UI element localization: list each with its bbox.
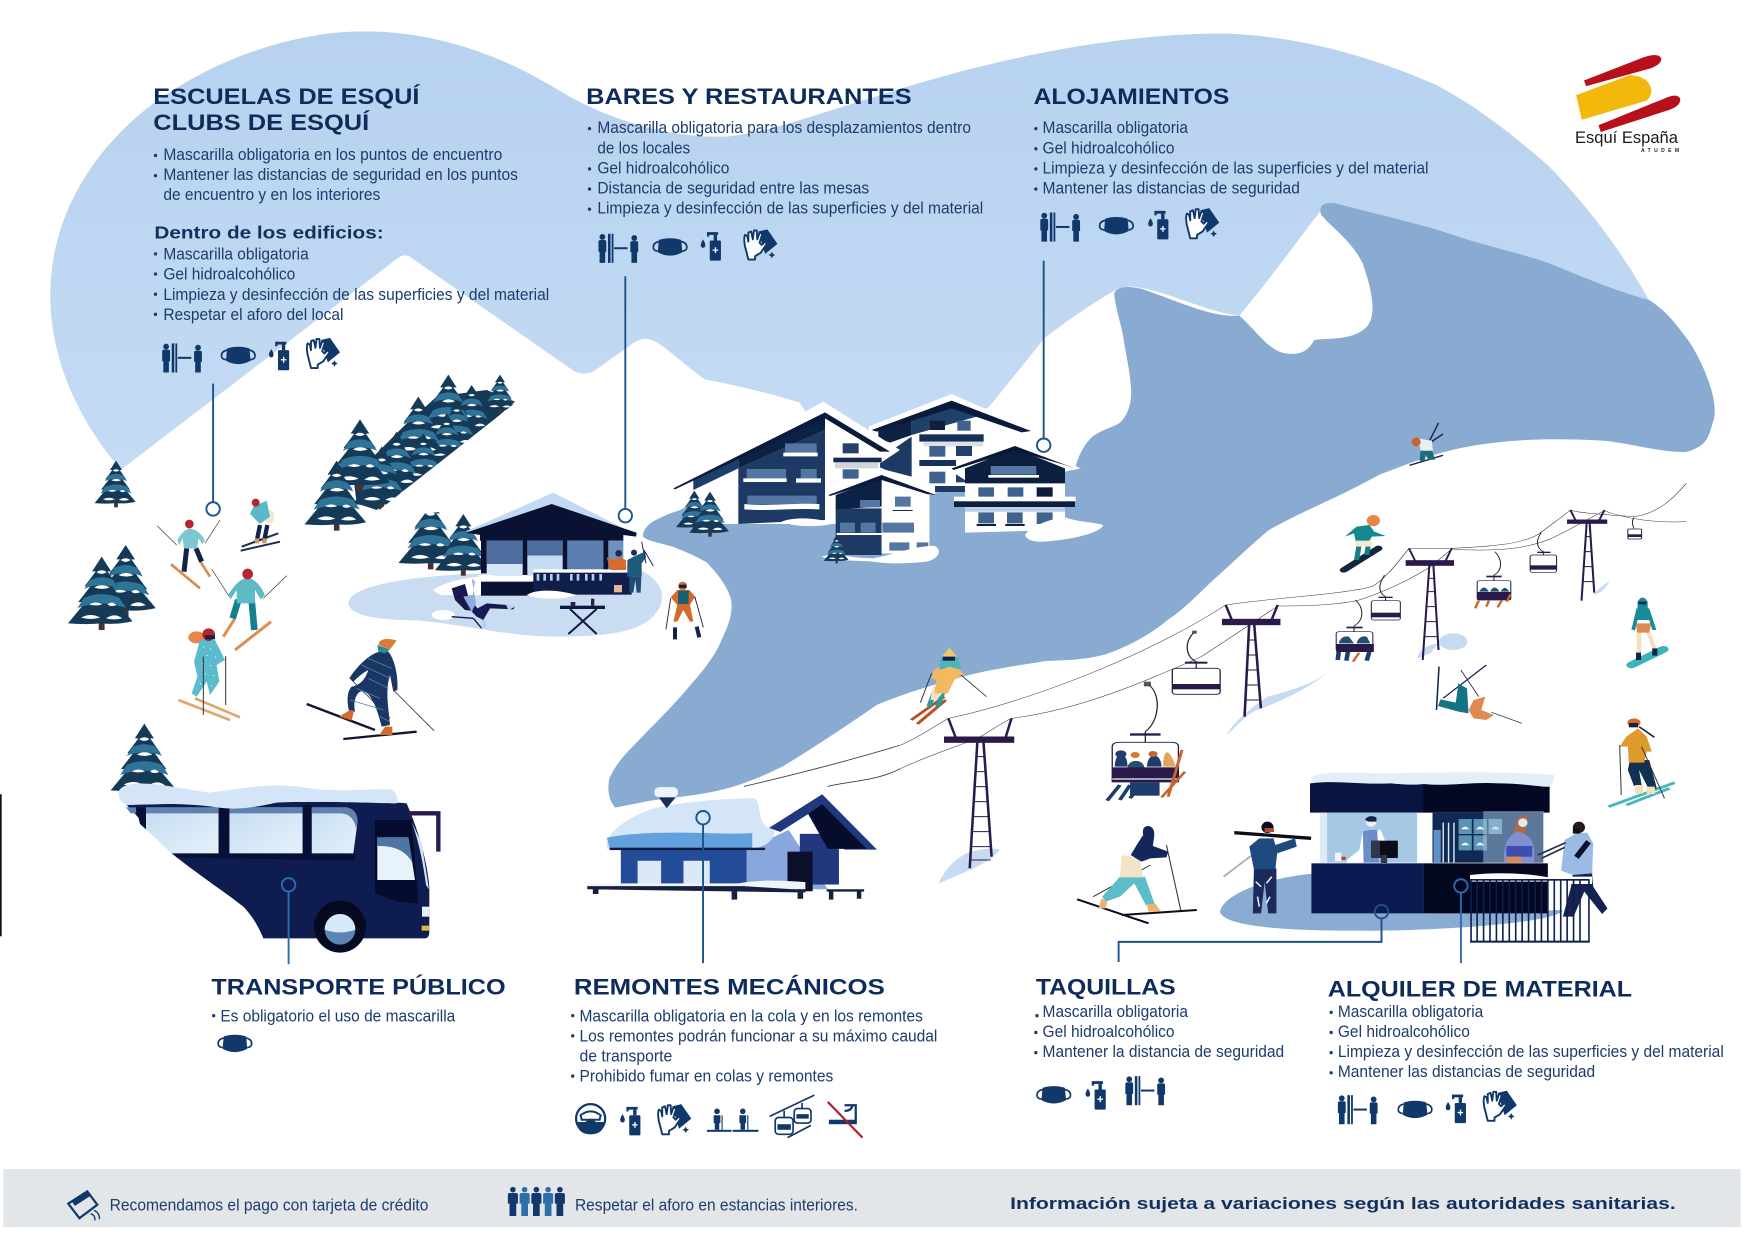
connector: remontes: [696, 811, 710, 963]
tree behind bus: [111, 724, 175, 797]
panel: remontes mecánicos: [571, 974, 937, 1138]
icon: edge mark: [0, 794, 2, 936]
logo: esquí españa: [1575, 55, 1680, 154]
skier teal back view: [157, 520, 220, 588]
chair with riders small 1: [1336, 600, 1374, 662]
text block: alquiler: [1329, 1002, 1724, 1081]
connector: taquillas: [1119, 905, 1388, 962]
text block: remontes: de transporte: [579, 1047, 672, 1066]
skier small with backpack: [241, 499, 280, 551]
station right wing: [747, 794, 877, 891]
cabin: [432, 493, 637, 620]
text block: bares: Gel hidroalcohólico: [597, 158, 729, 177]
fence: [1470, 873, 1590, 943]
terrace table: [560, 599, 605, 634]
skier navy striped: [307, 639, 434, 739]
connector: bares: [619, 276, 632, 522]
snow puddle: [348, 566, 662, 637]
skier orange: [666, 582, 703, 639]
pylon 2: [1223, 605, 1280, 717]
text block: alquiler: Mascarilla obligatoria: [1338, 1002, 1484, 1021]
fallen skier: [1436, 665, 1522, 723]
icon: glove: [658, 1104, 691, 1134]
heading: escuelas: ESCUELAS DE ESQUÍ: [153, 84, 421, 109]
text block: puntos de encuentro: Mascarilla obligatoria en los puntos de encuentro: [163, 145, 502, 164]
logo: esquí españa: Esquí España: [1575, 128, 1679, 147]
station terrace deck: [587, 881, 864, 900]
background: dark blue mountain and slope: [608, 203, 1715, 808]
footer bar: [3, 1169, 1741, 1227]
text block: remontes: Prohibido fumar en colas y remontes: [579, 1067, 833, 1086]
text block: bares: [588, 118, 983, 218]
illustration: lift station building: [587, 787, 877, 900]
text block: bares: Distancia de seguridad entre las mesas: [597, 179, 869, 198]
text block: alojamientos: Mascarilla obligatoria: [1043, 118, 1189, 137]
logo: esquí españa: ATUDEM: [1641, 148, 1679, 154]
small skier on the upper ridge: [1409, 423, 1443, 465]
man carrying skis: [1224, 822, 1311, 913]
icon: helmet mask: [576, 1104, 605, 1134]
cables: [901, 483, 1686, 768]
person on deck chair: [452, 578, 516, 628]
icon: gondolas: [770, 1095, 814, 1138]
pylon 3: [1406, 548, 1453, 660]
panel: taquillas: [1034, 974, 1284, 1110]
icon: queue distance: [707, 1109, 758, 1132]
snowboarder teal hood: [1631, 597, 1663, 665]
text block: puntos de encuentro: [154, 145, 518, 204]
pylon 4: [1568, 510, 1606, 601]
panel: transporte público: [211, 974, 506, 1052]
skier girl with dotted suit: [178, 628, 240, 720]
connector: alojamientos: [1037, 261, 1050, 452]
text block: alquiler: Mantener las distancias de seguridad: [1338, 1062, 1595, 1081]
trees beside cabin: [398, 499, 489, 576]
illustration: cabin restaurant scene: [348, 493, 703, 639]
connector: alquiler: [1454, 879, 1468, 963]
heading: escuelas: [153, 84, 421, 135]
text block: alojamientos: [1034, 118, 1428, 198]
gondola empty 2: [1371, 575, 1400, 620]
text block: alojamientos: Mantener las distancias de seguridad: [1043, 179, 1300, 198]
icons: taquillas: [1037, 1076, 1165, 1110]
heading: taquillas: TAQUILLAS: [1036, 974, 1176, 999]
rental window: [1432, 811, 1544, 863]
walking skier: [1077, 826, 1197, 923]
footer text: aforo: Respetar el aforo en estancias interiores.: [575, 1196, 858, 1214]
customer with jacket: [1538, 822, 1607, 917]
icon: people capacity: [508, 1187, 565, 1216]
illustration: skiers and firs on the left slope: [68, 375, 522, 739]
text block: alojamientos: Gel hidroalcohólico: [1043, 138, 1175, 157]
text block: dentro de los edificios: Gel hidroalcohólico: [163, 265, 295, 284]
icons: escuelas: [162, 338, 340, 373]
footer text: disclaimer: Información sujeta a variaciones según las autoridades sanitarias.: [1010, 1194, 1676, 1213]
chair with riders small 2: [1475, 552, 1511, 608]
text block: alquiler: Limpieza y desinfección de las superficies y del material: [1338, 1042, 1724, 1061]
background: light blue sky mountain: [50, 31, 1649, 470]
illustration: bus with snow: [111, 724, 438, 953]
text block: puntos de encuentro: de encuentro y en los interiores: [163, 185, 380, 204]
skier ochre jacket: [1609, 718, 1675, 807]
building: back right chalet: [868, 394, 1033, 493]
text block: taquillas: Gel hidroalcohólico: [1043, 1022, 1175, 1041]
bus wheel: [314, 901, 366, 953]
text block: remontes: Mascarilla obligatoria en la cola y en los remontes: [579, 1006, 923, 1025]
icon: no smoking: [828, 1102, 862, 1138]
ticket window: [1320, 813, 1417, 863]
panel: alquiler de material: [1328, 977, 1724, 1124]
pylon shadows: [1227, 581, 1610, 735]
building: front center chalet: [822, 467, 939, 563]
heading: transporte: TRANSPORTE PÚBLICO: [211, 974, 506, 999]
building: large left chalet: [668, 402, 900, 526]
firs: [68, 461, 156, 630]
panel: alojamientos: [1034, 84, 1428, 242]
forest: [304, 375, 522, 531]
text block: dentro de los edificios: [154, 245, 549, 324]
icons: alquiler: [1338, 1091, 1517, 1124]
gondola empty 3: [1530, 533, 1557, 572]
text block: dentro de los edificios: Mascarilla obligatoria: [163, 245, 309, 264]
icon: mask: [218, 1035, 252, 1052]
gondola empty 1: [1172, 631, 1220, 694]
text block: dentro de los edificios: Respetar el aforo del local: [163, 305, 343, 324]
text block: alquiler: Gel hidroalcohólico: [1338, 1022, 1470, 1041]
heading: alquiler: ALQUILER DE MATERIAL: [1328, 977, 1632, 1002]
text block: taquillas: Mascarilla obligatoria: [1043, 1002, 1189, 1021]
snow on bus roof: [119, 784, 398, 809]
kiosk roof with snow: [1310, 772, 1554, 813]
chair with riders large: [1107, 682, 1185, 801]
connector: transporte: [282, 878, 295, 964]
chairlift cable section near station: [744, 745, 900, 786]
text block: bares: Mascarilla obligatoria para los desplazamientos dentro: [597, 118, 971, 137]
connector: escuelas: [206, 384, 220, 516]
heading: bares: BARES Y RESTAURANTES: [586, 84, 912, 109]
text block: transporte: Es obligatorio el uso de mascarilla: [220, 1006, 456, 1025]
text block: dentro de los edificios: Limpieza y desinfección de las superficies y del material: [163, 285, 549, 304]
text block: taquillas: [1034, 1002, 1284, 1061]
panel: escuelas y clubs de esquí: [153, 84, 549, 373]
people on the terrace: [607, 542, 653, 593]
icons: bares: [598, 229, 777, 263]
pylon 1: [945, 718, 1013, 868]
pylon shadow: [939, 849, 1000, 884]
station snow roof: [607, 798, 775, 850]
illustration: chairlift line and skiers on the right slope: [901, 483, 1686, 868]
illustration: mountain lodge buildings: [668, 394, 1103, 563]
bus body: [126, 802, 438, 938]
icon: credit card: [68, 1191, 100, 1220]
snowboarder orange hair: [1344, 515, 1386, 570]
text block: puntos de encuentro: Mantener las distancias de seguridad en los puntos: [163, 165, 518, 184]
text block: bares: de los locales: [597, 138, 690, 157]
tree pair beside chalet: [676, 491, 729, 537]
text block: remontes: [571, 1006, 937, 1086]
footer text: card: Recomendamos el pago con tarjeta de crédito: [110, 1196, 428, 1214]
kiosk counter: [1311, 863, 1548, 913]
skier teal center: [212, 569, 287, 650]
icons: remontes: [576, 1095, 862, 1138]
skier yellow jumper: [911, 648, 987, 724]
illustration: ticket and rental kiosk: [1077, 772, 1607, 943]
heading: alojamientos: ALOJAMIENTOS: [1034, 84, 1229, 109]
station main body: [621, 849, 747, 884]
text block: bares: Limpieza y desinfección de las superficies y del material: [597, 199, 983, 218]
text block: remontes: Los remontes podrán funcionar a su máximo caudal: [579, 1026, 937, 1045]
ground shadow: [1220, 873, 1563, 931]
panel: bares y restaurantes: [586, 84, 983, 263]
station chimney: [654, 787, 678, 808]
heading: escuelas: CLUBS DE ESQUÍ: [153, 110, 370, 135]
icons: alojamientos: [1040, 208, 1219, 242]
subheading: Dentro de los edificios:: [154, 222, 384, 242]
gondola far: [1628, 517, 1642, 539]
heading: remontes: REMONTES MECÁNICOS: [574, 974, 885, 999]
text block: alojamientos: Limpieza y desinfección de las superficies y del material: [1043, 158, 1428, 177]
text block: taquillas: Mantener la distancia de seguridad: [1043, 1042, 1284, 1061]
icon: gel: [620, 1107, 640, 1135]
building: right chalet: [948, 439, 1103, 542]
